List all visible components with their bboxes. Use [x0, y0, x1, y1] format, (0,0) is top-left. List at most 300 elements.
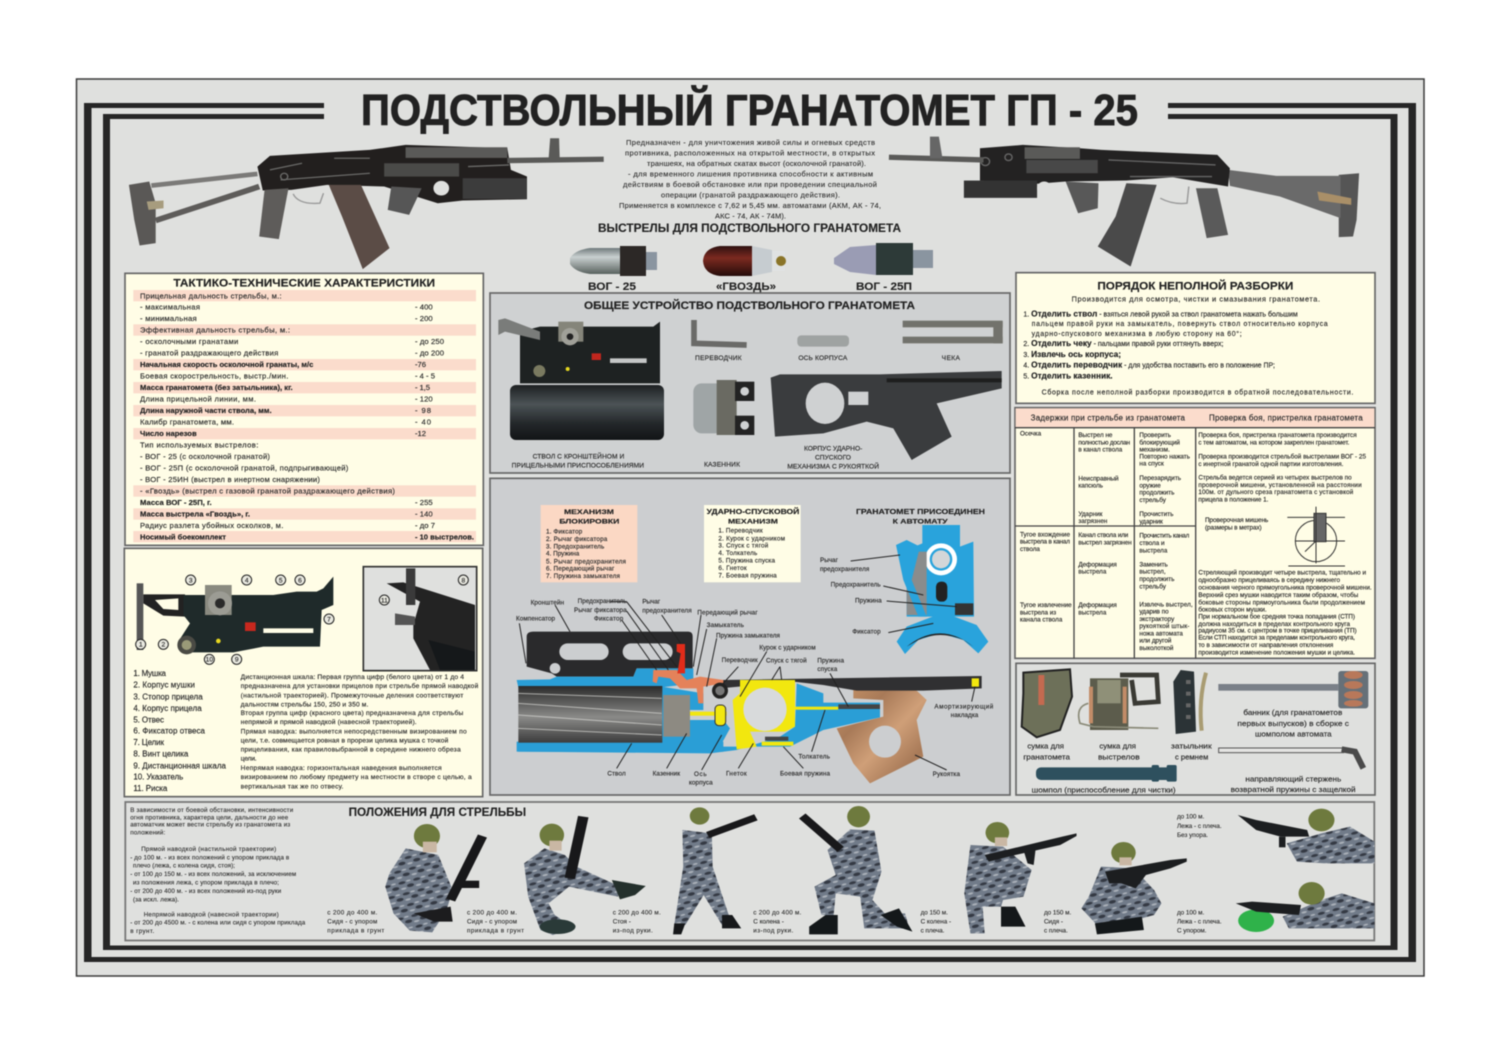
position captions: С упором.	[1177, 928, 1207, 935]
firing instructions: Прямой наводкой (настильной траектории)	[141, 846, 276, 853]
label: body axis: ОСЬ КОРПУСА	[798, 355, 848, 362]
parts list: 1. Мушка	[133, 669, 167, 678]
malfunctions table: Извлечь выстрел,	[1139, 601, 1193, 608]
image: trigger body with grip	[771, 371, 1002, 460]
labels: Пружина	[817, 657, 844, 664]
image: grenade Gvozd	[703, 246, 786, 276]
label: Gvozd: «ГВОЗДЬ»	[716, 281, 776, 293]
malfunctions table: выколоткой	[1139, 644, 1174, 652]
accessory labels: шомпол (приспособление для чистки)	[1032, 786, 1176, 795]
malfunctions table: продолжить	[1139, 576, 1175, 583]
zeroing text: боковые стороны прямоугольника были продолжением	[1198, 598, 1365, 606]
malfunctions table: Повторно нажать	[1139, 454, 1191, 461]
malfunctions table: в канал ствола	[1078, 447, 1123, 454]
malfunctions table: Тугое вхождение	[1020, 531, 1070, 538]
box: trigger mechanism: 4. Толкатель	[718, 550, 758, 557]
box: locking mechanism	[541, 505, 637, 582]
labels: Ось	[694, 771, 707, 778]
malfunctions table: на спуск	[1139, 461, 1164, 468]
firing instructions: В зависимости от боевой обстановки, интенсивности	[130, 807, 294, 814]
soldier: prone without rest	[1238, 809, 1374, 863]
position captions: до 100 м.	[1177, 814, 1205, 821]
malfunctions table: Деформация	[1078, 602, 1117, 609]
labels: Амортизирующий	[934, 702, 994, 710]
position captions: Лежа - с плеча.	[1177, 919, 1222, 926]
table rows: - минимальная	[140, 314, 197, 323]
labels: Толкатель	[798, 754, 831, 761]
box: locking mechanism: 4. Пружина	[546, 551, 580, 558]
table rows: - «Гвоздь» (выстрел с газовой гранатой раздражающего действия)	[140, 487, 395, 496]
soldier: kneeling left	[802, 806, 912, 934]
image: butt pad with sling	[1173, 670, 1206, 734]
accessory labels	[1023, 708, 1356, 795]
sight callout numbers: 5	[279, 577, 283, 584]
malfunctions table: рукояткой штык-	[1139, 622, 1189, 630]
malfunctions table: выстрела	[1139, 547, 1168, 554]
box: trigger mechanism: 5. Пружина спуска	[718, 558, 775, 565]
box: locking mechanism: 2. Рычаг фиксатора	[546, 536, 608, 543]
diagram: main cross-section	[516, 598, 994, 787]
image: guide rod	[1219, 748, 1363, 768]
image: sight	[137, 577, 333, 654]
sight description	[241, 673, 479, 790]
labels: launcher parts: СПУСКОГО	[815, 455, 851, 462]
table rows: Длина прицельной линии, мм.	[140, 395, 256, 404]
box: locking mechanism: МЕХАНИЗМ	[564, 509, 615, 516]
heading: attached to rifle: ГРАНАТОМЕТ ПРИСОЕДИНЕН	[856, 509, 985, 516]
table rows: - до 200	[415, 349, 444, 358]
soldier: standing	[673, 807, 756, 934]
zeroing text: производится изменение положения мушки и целика.	[1198, 649, 1355, 656]
table rows: Боевая скорострельность, выстр./мин.	[140, 372, 288, 381]
malfunctions table: выстрела	[1078, 609, 1107, 616]
malfunctions table: Деформация	[1078, 561, 1117, 568]
position captions: с 200 до 400 м.	[467, 910, 517, 917]
steps: Сборка после неполной разборки производится в обратной последовательности.	[1042, 388, 1353, 396]
firing instructions: в грунт.	[130, 928, 154, 935]
labels: предохранителя	[642, 607, 692, 614]
panel: general layout of grenade launcher	[490, 293, 1010, 473]
barrel rifling	[518, 686, 662, 743]
parts list: 11. Риска	[133, 784, 168, 793]
steps: пальцем правой руки на замыкатель, повернуть ствол относительно корпуса	[1032, 320, 1328, 328]
firing instructions: огня противника, характера цели, дальности до нее	[130, 814, 289, 821]
table rows	[133, 290, 476, 542]
steps: 3. Извлечь ось корпуса;	[1023, 349, 1121, 359]
label: VOG-25: ВОГ - 25	[588, 281, 636, 293]
malfunctions table: Тугое извлечение	[1020, 602, 1072, 609]
table rows: - осколочными гранатами	[140, 337, 238, 346]
labels: корпуса	[689, 780, 713, 787]
orange levers	[653, 670, 723, 703]
sight description: непрямой и прямой наводкой (навесной траекторией).	[241, 718, 417, 726]
accessory labels: затыльник	[1171, 742, 1212, 751]
sight description: Вторая группа цифр (красного цвета) предназначена для стрельбы	[241, 709, 464, 717]
heading: attached to rifle: К АВТОМАТУ	[893, 518, 949, 525]
accessory labels: с ремнем	[1175, 752, 1208, 761]
table rows: - до 250	[415, 337, 444, 346]
malfunctions table: Осечка	[1020, 431, 1042, 438]
inset photo: 8	[461, 577, 465, 584]
position captions: с 200 до 400 м.	[753, 910, 802, 917]
damper	[972, 678, 979, 687]
target diagram	[1287, 507, 1345, 566]
steps: 4. Отделить переводчик - для удобства поставить его в положение ПР;	[1023, 360, 1275, 370]
box: trigger mechanism: 3. Спуск с тягой	[718, 542, 769, 550]
malfunctions table: выстрел загрязнен	[1078, 539, 1132, 546]
malfunctions table: ножа автомата	[1139, 630, 1183, 637]
position captions: до 150 м.	[921, 910, 948, 917]
panel: mechanism cross-section	[490, 478, 1010, 795]
sight description: цели.	[241, 756, 257, 763]
labels: Ствол	[607, 770, 626, 777]
firing instructions: - от 100 до 150 м. - из всех положений, за исключением	[130, 871, 296, 878]
table rows: Прицельная дальность стрельбы, м.:	[140, 291, 282, 300]
zeroing text: При нормальном бое средняя точка попадания (СТП)	[1198, 613, 1355, 621]
parts list: 9. Дистанционная шкала	[133, 761, 227, 770]
box: trigger mechanism	[704, 505, 801, 582]
table rows: - 10 выстрелов.	[415, 532, 474, 541]
intro text: purpose: операции (гранатой раздражающего действия).	[661, 190, 840, 200]
malfunctions table: Ударник	[1078, 511, 1103, 518]
malfunctions table: выстрела из	[1020, 609, 1056, 616]
steps: ударно-спускового механизма в любую сторону на 60°;	[1032, 330, 1242, 338]
table rows: - гранатой раздражающего действия	[140, 349, 278, 358]
labels	[516, 598, 994, 787]
sight description: дальностям стрельбы 150, 250 и 350 м.	[241, 700, 368, 708]
table rows: - 98	[415, 406, 431, 415]
malfunctions table: канала ствола	[1020, 617, 1063, 624]
position captions	[327, 814, 1222, 935]
image: launcher bag	[1022, 669, 1072, 737]
sight callout numbers: 2	[161, 642, 165, 649]
table rows: Длина наружной части ствола, мм.	[140, 406, 272, 415]
labels: Переводчик	[722, 657, 758, 664]
malfunctions table: ударник	[1139, 518, 1163, 525]
accessory labels: первых выпусков) в сборке с	[1237, 719, 1349, 728]
labels: Компенсатор	[516, 615, 555, 622]
header band: Проверка боя, пристрелка гранатомета	[1209, 413, 1363, 422]
intro text: purpose: действиям в боевой обстановке или при проведении специальной	[623, 180, 877, 189]
soldier: kneeling aiming	[964, 822, 1077, 933]
steps	[1023, 309, 1353, 396]
table rows: Тип используемых выстрелов:	[140, 441, 258, 450]
malfunctions table	[1020, 431, 1193, 652]
position captions: Сидя - с упором	[467, 919, 517, 926]
sight description: (настильной траекторией). Промежуточные деления соответствуют	[241, 691, 463, 699]
image: cleaning rod with brush	[1218, 671, 1368, 708]
soldier: seated, butt on ground	[385, 824, 482, 932]
intro text: purpose: - для временного лишения противника способности к активным	[628, 170, 873, 178]
parts list	[133, 669, 227, 793]
blue receiver	[517, 668, 693, 687]
heading: grenades: ВЫСТРЕЛЫ ДЛЯ ПОДСТВОЛЬНОГО ГРАНАТОМЕТА	[598, 223, 901, 235]
diagram: launcher attached to rifle section: Пружина	[855, 598, 882, 605]
image: grenade VOG-25	[570, 246, 657, 276]
zeroing text: с тем автоматом, на котором закреплен гранатомет.	[1198, 440, 1350, 447]
table rows: Эффективная дальность стрельбы, м.:	[140, 326, 290, 335]
labels: накладка	[951, 712, 979, 719]
box: trigger mechanism: МЕХАНИЗМ	[728, 518, 779, 525]
malfunctions table: Проверить	[1139, 432, 1172, 439]
labels: Пружина замыкателя	[716, 633, 780, 640]
accessory labels: возвратной пружины с защелкой	[1231, 785, 1356, 794]
parts list: 4. Корпус прицела	[133, 704, 202, 713]
malfunctions table: выстрела	[1078, 569, 1107, 576]
image: breech	[693, 380, 754, 435]
steps: 5. Отделить казенник.	[1023, 371, 1113, 381]
malfunctions table: капсюль	[1078, 483, 1104, 490]
table rows: - 40	[415, 418, 431, 427]
soldiers left group	[385, 807, 756, 935]
header band: Задержки при стрельбе из гранатомета	[1031, 413, 1186, 422]
image: pin	[903, 321, 1003, 343]
diagram: launcher attached to rifle section	[820, 525, 988, 654]
firing instructions: из положения лежа, с упором приклада в плечо;	[133, 880, 279, 887]
table rows: Калибр гранатомета, мм.	[140, 418, 234, 427]
labels: Гнеток	[726, 770, 747, 777]
label: VOG-25P: ВОГ - 25П	[856, 281, 912, 293]
malfunctions table: Прочистить	[1139, 511, 1174, 518]
sight callout numbers: 9	[235, 657, 239, 664]
table rows: - 140	[415, 510, 433, 519]
labels: launcher parts	[512, 446, 879, 471]
heading: stripping: ПОРЯДОК НЕПОЛНОЙ РАЗБОРКИ	[1097, 280, 1293, 293]
accessory labels: шомполом автомата	[1255, 730, 1332, 739]
sight callout numbers: 3	[189, 577, 193, 584]
table rows: Масса выстрела «Гвоздь», г.	[140, 510, 250, 519]
box: locking mechanism: 6. Передающий рычаг	[546, 565, 615, 573]
zeroing text: с инертной гранатой одной партии изготовления.	[1198, 460, 1344, 468]
position captions: приклада в грунт	[467, 928, 524, 935]
zeroing text: 100м. от дульного среза гранатомета с установкой	[1198, 488, 1354, 496]
sight callout numbers: 7	[327, 616, 331, 623]
image: ammo bag	[1079, 675, 1158, 730]
parts list: 6. Фиксатор отвеса	[133, 727, 206, 736]
sight callout numbers	[136, 575, 334, 664]
labels: Боевая пружина	[780, 770, 830, 777]
soldier: prone with rest	[1236, 882, 1374, 932]
position captions: из-под руки.	[613, 928, 653, 935]
panel: firing positions	[125, 802, 1374, 940]
intro text: purpose	[619, 138, 881, 220]
heading: specs: ТАКТИКО-ТЕХНИЧЕСКИЕ ХАРАКТЕРИСТИКИ	[173, 277, 435, 289]
steps: 2. Отделить чеку - пальцами правой руки оттянуть вверх;	[1023, 338, 1223, 348]
malfunctions table: механизм.	[1139, 446, 1170, 453]
position captions: с 200 до 400 м.	[327, 910, 378, 917]
zeroing text: Стреляющий производит четыре выстрела, тщательно и	[1198, 569, 1366, 577]
sight callout numbers: 4	[245, 577, 249, 584]
title: ПОДСТВОЛЬНЫЙ ГРАНАТОМЕТ ГП - 25	[361, 84, 1138, 135]
malfunctions table: блокирующий	[1139, 438, 1180, 446]
labels: launcher parts: СТВОЛ С КРОНШТЕЙНОМ И	[533, 452, 625, 461]
heading: attached to rifle	[856, 509, 985, 525]
image: body axis	[797, 335, 849, 347]
poster background	[76, 79, 1424, 976]
firing instructions: положений:	[130, 829, 165, 836]
malfunctions table: Неисправный	[1078, 474, 1119, 482]
sight description: предназначена для установки прицелов при стрельбе прямой наводкой	[241, 682, 479, 690]
zeroing text: проверочной мишени, установленной на расстоянии	[1198, 481, 1362, 489]
label: pin: ЧЕКА	[942, 355, 961, 362]
labels: launcher parts: МЕХАНИЗМА С РУКОЯТКОЙ	[787, 462, 879, 471]
sight description: вертикальная так же по отвесу.	[241, 783, 343, 790]
labels: Спуск с тягой	[766, 657, 807, 665]
malfunctions table: ударив по	[1139, 609, 1169, 616]
sight callout numbers: 1	[139, 642, 143, 649]
malfunctions table: ствола	[1020, 546, 1040, 553]
label: selector: ПЕРЕВОДЧИК	[695, 355, 742, 362]
sight description: цели, т.е. совмещается ровная в прорези целика мушка с точкой	[241, 737, 449, 745]
box: locking mechanism: 3. Предохранитель	[546, 543, 605, 550]
intro text: purpose: противника, расположенных на открытой местности, в открытых	[625, 148, 875, 158]
soldier: cross-legged	[1081, 842, 1187, 934]
dark top rail	[720, 676, 982, 691]
diagram: launcher attached to rifle section: предохранителя	[820, 566, 869, 573]
firing instructions	[130, 807, 306, 935]
labels: Рычаг фиксатора	[574, 607, 627, 614]
position captions: приклада в грунт	[327, 928, 384, 935]
zeroing text: Проверка производится стрельбой выстрелами ВОГ - 25	[1198, 453, 1366, 461]
zeroing text: Стрельба ведется серией из четырех выстрелов по	[1198, 473, 1352, 481]
malfunctions table: Канал ствола или	[1078, 532, 1129, 539]
panel: accessories	[1016, 663, 1375, 795]
zeroing text: прицела в положение 1.	[1198, 496, 1269, 503]
box: trigger mechanism: 2. Курок с ударником	[718, 535, 785, 542]
firing instructions: - до 100 м. - из всех положений с упором приклада в	[130, 854, 290, 861]
firing instructions: (за искл. лежа).	[133, 896, 179, 903]
sight description: Непрямая наводка: горизонтальная наведения выполняется	[241, 765, 442, 772]
zeroing text	[1198, 431, 1372, 656]
wood grip	[837, 687, 927, 783]
image: ramrod tool	[1036, 765, 1177, 782]
labels: Замыкатель	[707, 622, 745, 629]
parts list: 7. Целик	[133, 738, 164, 747]
firing instructions: - от 200 до 400 м. - из всех положений из-под руки	[130, 888, 282, 895]
malfunctions table: выстрела в канал	[1020, 539, 1070, 546]
position captions: Лежа - с плеча.	[1177, 823, 1222, 830]
malfunctions table: выстрел,	[1139, 569, 1166, 576]
zeroing text: Если СТП находится за пределами контрольного круга,	[1198, 635, 1355, 642]
table rows: - ВОГ - 25П (с осколочной гранатой, подпрыгивающей)	[140, 464, 349, 473]
zeroing text: однообразно прицеливаясь в середину нижнего	[1198, 576, 1340, 584]
table rows: Масса ВОГ - 25П, г.	[140, 498, 212, 507]
zeroing text: радиусом 35 см. с центром в точке прицеливания (ТП)	[1198, 628, 1357, 635]
malfunctions table: оружие	[1139, 482, 1161, 489]
intro text: purpose: АКС - 74, АК - 74М).	[715, 212, 786, 220]
sight description: визированием по любому предмету на местности в створе с целью, а	[241, 773, 472, 781]
yellow trigger parts	[733, 680, 795, 749]
red lever	[677, 644, 685, 673]
table rows: - ВОГ - 25 (с осколочной гранатой)	[140, 452, 270, 461]
table rows: - максимальная	[140, 303, 200, 312]
zeroing text: основания черного прямоугольника проверочной мишени.	[1198, 584, 1372, 592]
firing instructions: Непрямой наводкой (навесной траектории)	[144, 911, 279, 918]
soldiers right group	[802, 806, 1374, 934]
diagram: launcher attached to rifle section: Рычаг	[820, 557, 839, 564]
sight description: Дистанционная шкала: Первая группа цифр (белого цвета) от 1 до 4	[241, 673, 464, 681]
position captions: Сидя - с упором	[327, 919, 377, 926]
table rows: Начальная скорость осколочной гранаты, м/с	[140, 360, 314, 369]
labels: Рычаг	[642, 599, 661, 606]
table rows: - 400	[415, 303, 433, 312]
parts list: 8. Винт целика	[133, 750, 189, 759]
zeroing text: Проверка боя, пристрелка гранатомета производится	[1198, 431, 1357, 439]
malfunctions table: экстрактору	[1139, 616, 1175, 623]
malfunctions table: Выстрел не	[1078, 432, 1113, 439]
bracket	[527, 632, 693, 677]
table rows: - 200	[415, 314, 433, 323]
steps: 1. Отделить ствол - взяться левой рукой за ствол гранатомета нажать большим	[1023, 309, 1298, 319]
malfunctions table: стрельбу	[1139, 496, 1167, 504]
parts list: 3. Стопор прицела	[133, 692, 203, 701]
accessory labels: направляющий стержень	[1245, 775, 1341, 784]
image: assembled launcher	[498, 318, 664, 440]
malfunctions table: стрельбу	[1139, 583, 1167, 591]
box: locking mechanism: 7. Пружина замыкателя	[546, 573, 620, 580]
position captions: с 200 до 400 м.	[613, 910, 661, 917]
position captions: Сидя -	[1044, 919, 1063, 926]
position captions: с плеча.	[1044, 928, 1068, 935]
parts list: 5. Отвес	[133, 715, 164, 724]
accessory labels: гранатомета	[1023, 752, 1071, 761]
zeroing text: Проверочная мишень	[1205, 517, 1269, 524]
leader lines	[519, 602, 975, 770]
panel: field stripping order	[1016, 273, 1375, 403]
malfunctions table: продолжить	[1139, 490, 1175, 497]
soldier: seated, leg raised	[524, 817, 646, 935]
malfunctions table: Заменить	[1139, 561, 1168, 568]
malfunctions table: ствола и	[1139, 540, 1165, 547]
labels: launcher parts: КАЗЕННИК	[704, 462, 740, 469]
labels: Казенник	[653, 771, 680, 778]
labels: launcher parts: КОРПУС УДАРНО-	[804, 446, 862, 453]
sight description: Прямая наводка: выполняется непосредственным визированием по	[241, 728, 467, 735]
image: rifle with grenade launcher, left	[129, 138, 604, 269]
parts list: 2. Корпус мушки	[133, 681, 195, 690]
table rows: -12	[415, 429, 426, 438]
labels: Кронштейн	[531, 599, 564, 607]
accessory labels: банник (для гранатометов	[1243, 708, 1342, 717]
box: locking mechanism: 5. Рычаг предохранителя	[546, 558, 626, 565]
position captions: с плеча.	[921, 928, 945, 935]
position captions: С колена -	[753, 919, 784, 926]
box: trigger mechanism: УДАРНО-СПУСКОВОЙ	[707, 507, 799, 516]
sight description: прицеливания, как правиловыбранной в середине нижнего обреза	[241, 745, 461, 753]
firing instructions: плечо (лежа, с колена сидя, стоя);	[133, 863, 235, 870]
inset photo	[363, 567, 477, 671]
table rows: - ВОГ - 25ИН (выстрел в инертном снаряжении)	[140, 475, 320, 484]
table rows: - 4 - 5	[415, 372, 435, 381]
firing instructions: - от 200 до 4500 м. - с колена или сидя с упором приклада	[130, 920, 306, 927]
accessory labels: выстрелов	[1098, 752, 1140, 761]
table rows: Радиус разлета убойных осколков, м.	[140, 521, 283, 530]
subtitle: Производится для осмотра, чистки и смазывания гранатомета.	[1072, 295, 1320, 304]
diagram: launcher attached to rifle section: Предохранитель	[831, 582, 881, 589]
table rows: Носимый боекомплект	[140, 532, 226, 541]
position captions: до 150 м.	[1044, 910, 1072, 917]
panel: malfunctions and zeroing	[1015, 408, 1375, 658]
table rows: - 1,5	[415, 383, 430, 392]
labels: launcher parts: ПРИЦЕЛЬНЫМИ ПРИСПОСОБЛЕНИЯМИ	[512, 463, 644, 470]
labels: спуска	[817, 666, 838, 673]
image: selector	[694, 320, 747, 345]
position captions: С колена -	[921, 919, 951, 926]
intro text: purpose: Предназначен - для уничтожения живой силы и огневых средств	[626, 138, 875, 147]
labels: Рукоятка	[933, 771, 960, 778]
selector knob	[712, 683, 728, 699]
sight callout numbers: 6	[298, 577, 302, 584]
